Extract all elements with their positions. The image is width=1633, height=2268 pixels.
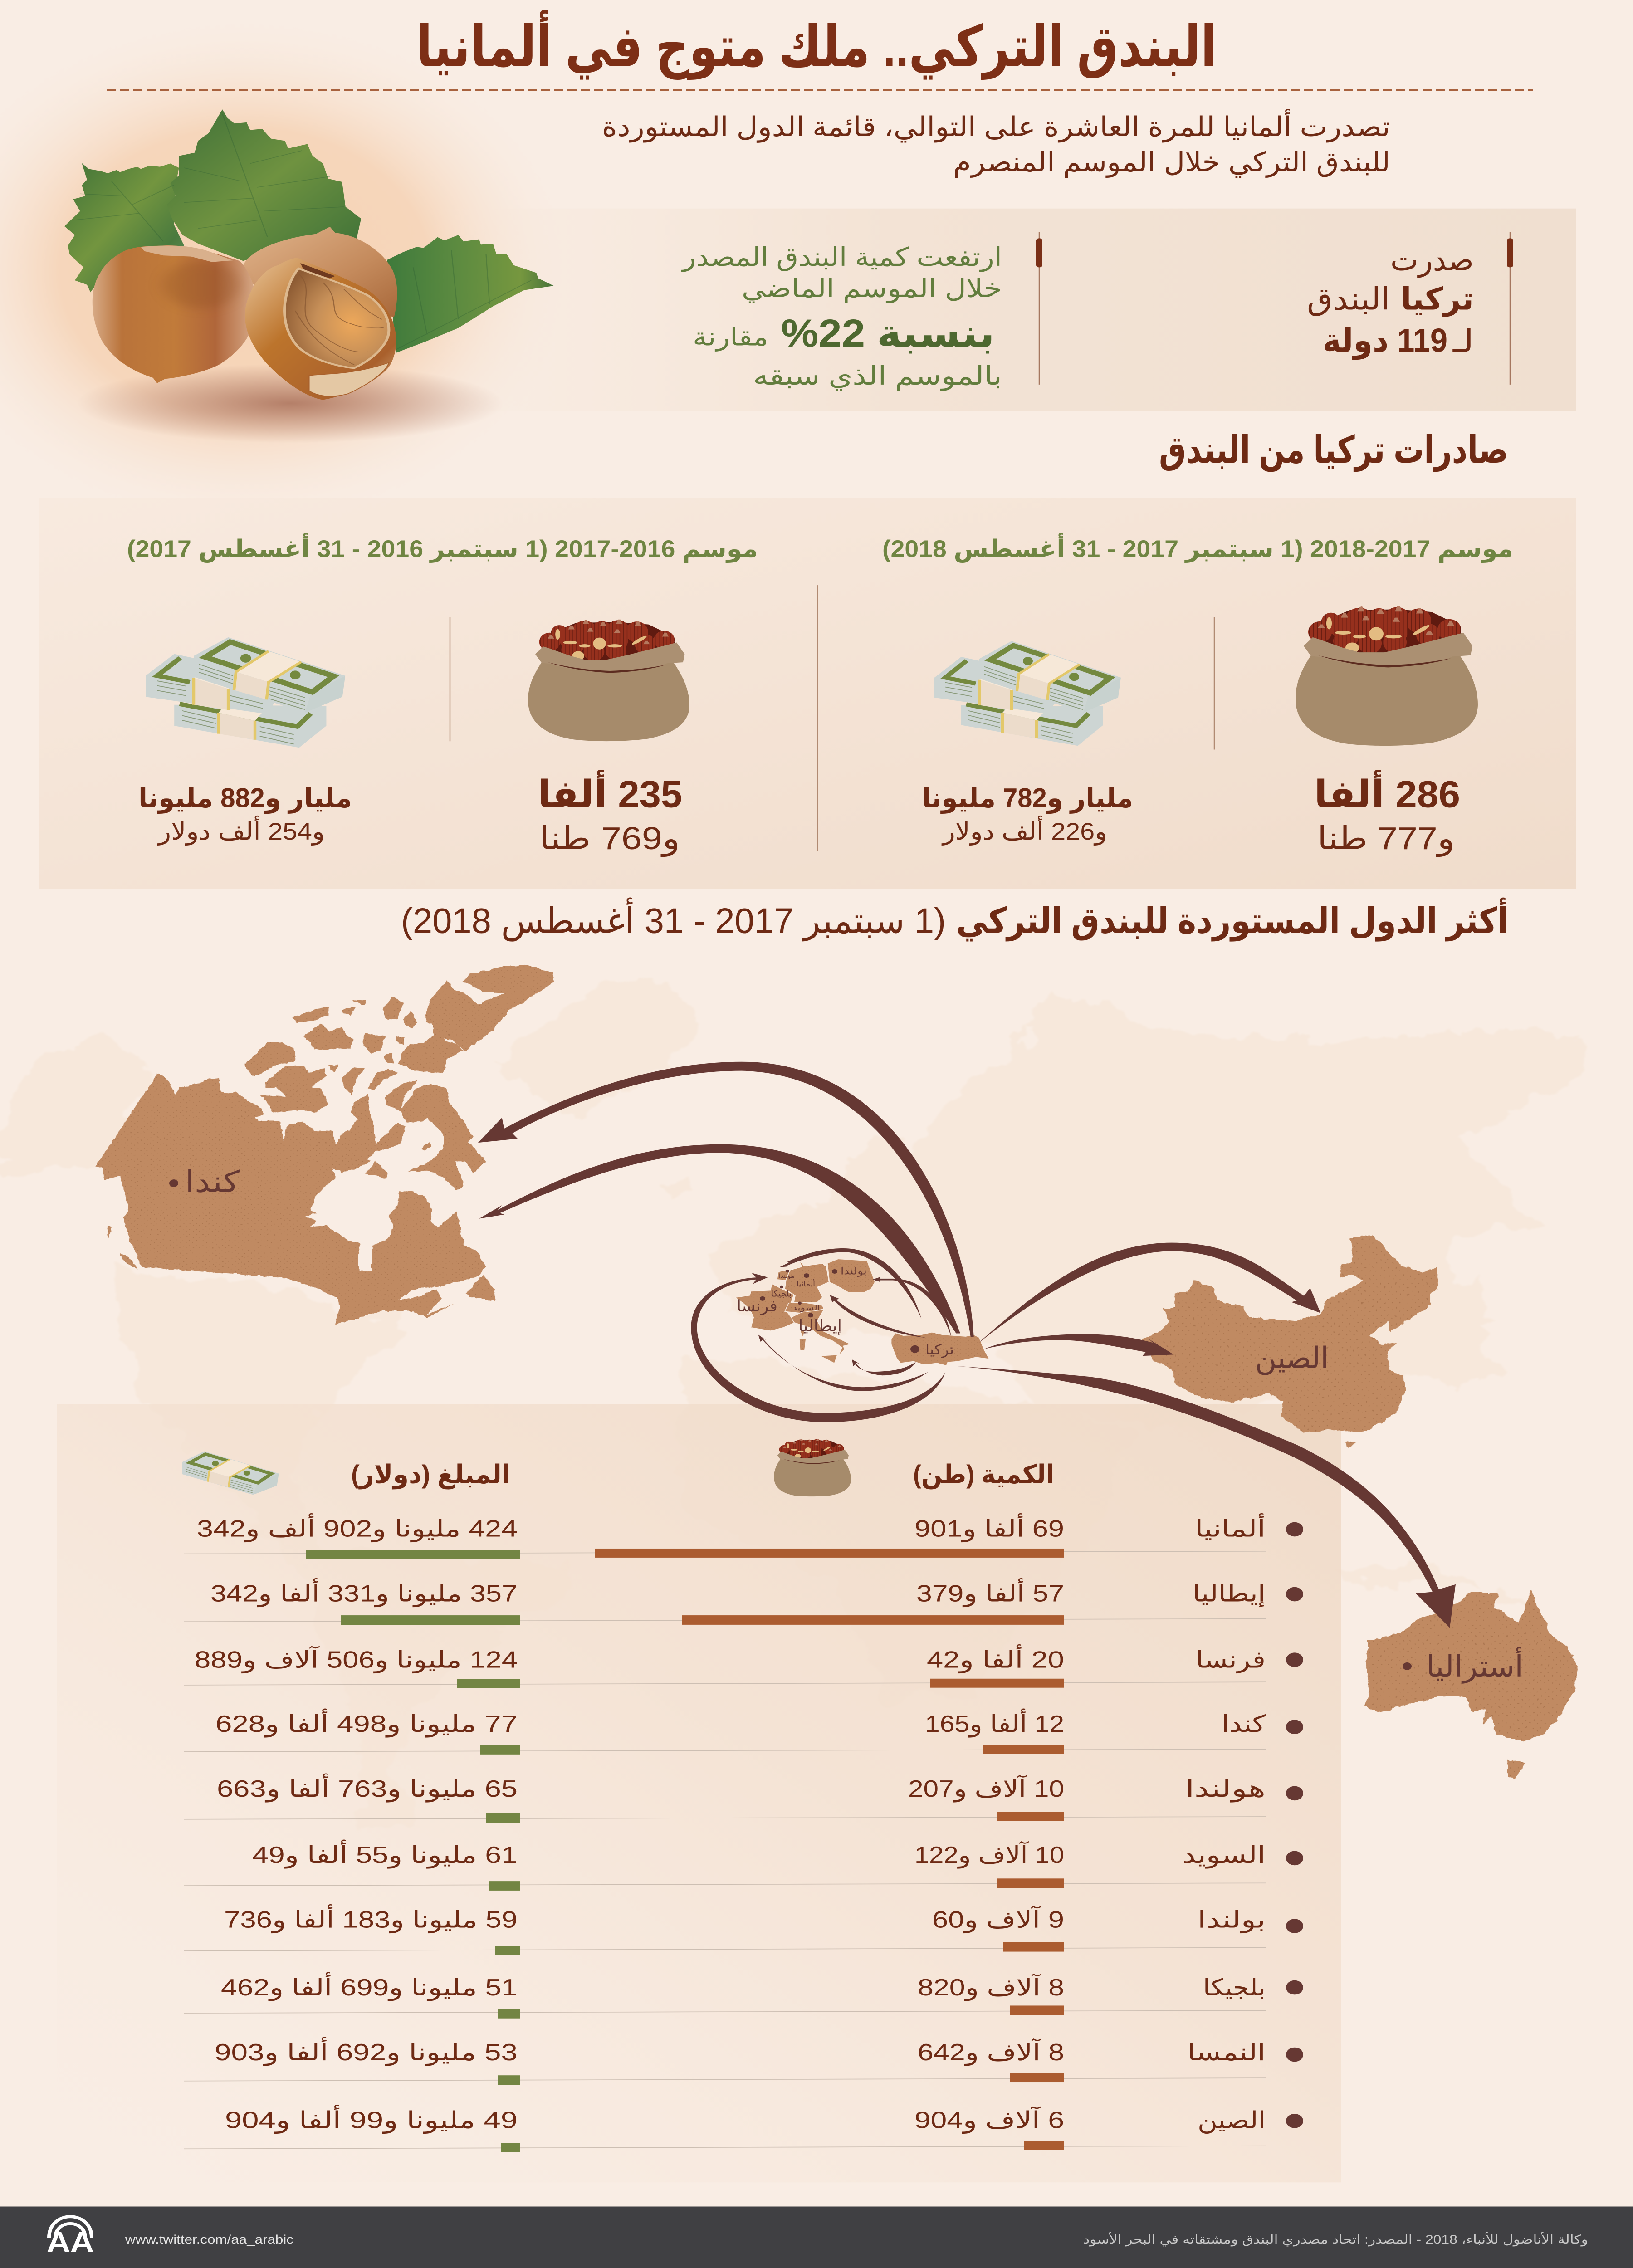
row: Belgium [184, 1972, 1303, 2019]
map labels: إيطاليا [798, 1317, 842, 1335]
row: Italy: إيطاليا [1193, 1580, 1266, 1608]
row: Italy: 357 مليونا و331 ألفا و342 [210, 1578, 518, 1607]
map labels: الصين [1255, 1342, 1329, 1375]
nut background glow [0, 11, 581, 532]
row: Belgium: 51 مليونا و699 ألفا و462 [221, 1972, 518, 2001]
stat: 2017 value: مليار و882 مليونا [138, 783, 352, 814]
row: Austria: 53 مليونا و692 ألفا و903 [215, 2037, 518, 2066]
title: البندق التركي.. ملك متوج في ألمانيا [416, 10, 1217, 80]
row: Canada: 77 مليونا و498 ألفا و628 [215, 1708, 518, 1738]
stat: 2017 quantity [538, 770, 682, 857]
row: China: 49 مليونا و99 ألفا و904 [225, 2105, 518, 2134]
divider: increase column [1036, 232, 1042, 385]
icon: sack of hazelnuts 2017 [528, 620, 689, 741]
heading: top importers [401, 897, 1508, 942]
table header: value: المبلغ (دولار) [351, 1460, 510, 1490]
row: Belgium: بلجيكا [1203, 1975, 1266, 2001]
icon: sack of hazelnuts 2018 [1296, 606, 1478, 746]
stat: 2018 value [922, 783, 1133, 846]
text: exports to 119 countries: 119 دولة [1323, 322, 1447, 360]
arrows: Turkey to Europe [691, 1248, 951, 1422]
row: Sweden: 10 آلاف و122 [914, 1841, 1064, 1869]
stat: 2017 quantity: 235 ألفا [538, 770, 682, 816]
stat: 2018 quantity [1314, 770, 1460, 857]
stat: 2017 value: و254 ألف دولار [157, 816, 325, 846]
row: France: فرنسا [1196, 1647, 1266, 1673]
season title 2016-2017: موسم 2016-2017 (1 سبتمبر 2016 - 31 أغسطس 2017) [127, 533, 758, 563]
row: Canada [184, 1708, 1303, 1755]
row: Poland: 9 آلاف و60 [932, 1906, 1064, 1933]
row: Canada: كندا [1222, 1711, 1266, 1737]
intro text: تصدرت ألمانيا للمرة العاشرة على التوالي، قائمة الدول المستوردة [602, 109, 1390, 143]
row: Germany: ألمانيا [1195, 1513, 1266, 1542]
map labels: تركيا [925, 1342, 954, 1358]
row: Netherlands: 65 مليونا و763 ألفا و663 [217, 1773, 518, 1803]
footer bar [0, 2207, 1633, 2268]
table header: quantity [774, 1439, 1054, 1496]
stat: 2018 quantity: و777 طنا [1317, 821, 1455, 857]
map: China [1141, 1234, 1437, 1449]
panel: table [57, 1404, 1341, 2182]
row: Germany [184, 1513, 1303, 1559]
text: 22 percent increase: ارتفعت كمية البندق المصدر [681, 243, 1002, 272]
row: France: 20 ألفا و42 [927, 1644, 1064, 1673]
panel: seasons [39, 498, 1576, 889]
text: exports to 119 countries: لـ [1452, 324, 1474, 358]
title dashed divider [107, 89, 1533, 91]
row: Sweden [184, 1840, 1303, 1891]
text: exports to 119 countries: البندق [1307, 282, 1390, 316]
text: exports to 119 countries: صدرت [1390, 243, 1474, 278]
logo: AA: AA [47, 2226, 94, 2258]
season title 2017-2018: موسم 2017-2018 (1 سبتمبر 2017 - 31 أغسطس 2018) [882, 533, 1513, 563]
arrow: Turkey to Australia [956, 1366, 1456, 1628]
stat: 2017 value [138, 783, 352, 846]
row: Italy: 57 ألفا و379 [916, 1578, 1064, 1607]
row: Austria: 8 آلاف و642 [918, 2038, 1064, 2066]
arrows: Turkey to Canada and China [478, 1062, 1320, 1356]
map labels: فرنسا [737, 1297, 777, 1315]
stat: 2018 value: مليار و782 مليونا [922, 783, 1133, 814]
map: Canada [95, 965, 553, 1325]
map: Europe and Turkey [735, 1259, 988, 1365]
table header: value [182, 1452, 510, 1495]
row: China: 6 آلاف و904 [914, 2106, 1064, 2134]
footer link: www.twitter.com/aa_arabic [125, 2233, 293, 2246]
icon: money stacks 2017 [146, 637, 345, 748]
stat: 2017 quantity: و769 طنا [539, 821, 680, 857]
row: China: الصين [1198, 2107, 1266, 2134]
row: Sweden: 61 مليونا و55 ألفا و49 [252, 1840, 518, 1869]
illustration: hazelnuts and leaves [64, 109, 554, 443]
row: Austria: النمسا [1187, 2039, 1266, 2066]
row: Canada: 12 ألفا و165 [925, 1708, 1064, 1738]
map: Australia [1364, 1590, 1578, 1778]
row: Italy [184, 1578, 1303, 1625]
row: Belgium: 8 آلاف و820 [918, 1973, 1064, 2001]
map labels: السويد [792, 1303, 820, 1312]
text: 22 percent increase: بالموسم الذي سبقه [753, 362, 1002, 391]
row: Sweden: السويد [1182, 1842, 1266, 1869]
footer source: وكالة الأناضول للأنباء، 2018 - المصدر: اتحاد مصدري البندق ومشتقاته في البحر الأسود [1083, 2232, 1588, 2247]
text: 22 percent increase [681, 243, 1002, 391]
stat: 2018 quantity: 286 ألفا [1314, 770, 1460, 816]
map labels: ألمانيا [797, 1279, 815, 1288]
row: Netherlands: هولندا [1185, 1776, 1266, 1803]
icon: money stacks 2018 [934, 641, 1121, 746]
map labels [169, 1166, 1523, 1684]
faint world map background [0, 980, 1583, 1828]
row: Germany: 424 مليونا و902 ألف و342 [197, 1513, 518, 1542]
intro text [602, 109, 1390, 178]
map labels: أستراليا [1426, 1647, 1523, 1684]
map labels: هولندا [779, 1273, 794, 1280]
row: China [184, 2105, 1303, 2152]
text: 22 percent increase: مقارنة [693, 323, 768, 352]
row: Austria [184, 2037, 1303, 2085]
row: France [184, 1644, 1303, 1688]
intro text: للبندق التركي خلال الموسم المنصرم [953, 147, 1390, 178]
text: 22 percent increase: بنسبة 22% [781, 312, 995, 356]
panel: export summary [431, 209, 1576, 411]
dividers in seasons panel [450, 585, 1214, 850]
heading: top importers: (1 سبتمبر 2017 - 31 أغسطس 2018) [401, 897, 946, 942]
row: France: 124 مليونا و506 آلاف و889 [195, 1646, 518, 1673]
row: Poland: بولندا [1198, 1906, 1266, 1933]
text: exports to 119 countries [1307, 243, 1474, 360]
map labels: كندا [185, 1166, 240, 1198]
divider: countries column [1507, 232, 1513, 385]
row: Netherlands: 10 آلاف و207 [908, 1774, 1064, 1803]
row: Netherlands [184, 1773, 1303, 1823]
table header: quantity: الكمية (طن) [913, 1460, 1054, 1489]
row: Poland: 59 مليونا و183 ألفا و736 [224, 1904, 518, 1933]
row: Germany: 69 ألفا و901 [914, 1513, 1064, 1542]
map labels: بلجيكا [771, 1289, 792, 1299]
map labels: بولندا [841, 1266, 867, 1277]
stat: 2018 value: و226 ألف دولار [941, 816, 1107, 846]
row: Poland [184, 1904, 1303, 1955]
text: exports to 119 countries: تركيا [1401, 282, 1474, 318]
text: 22 percent increase: خلال الموسم الماضي [742, 274, 1002, 303]
